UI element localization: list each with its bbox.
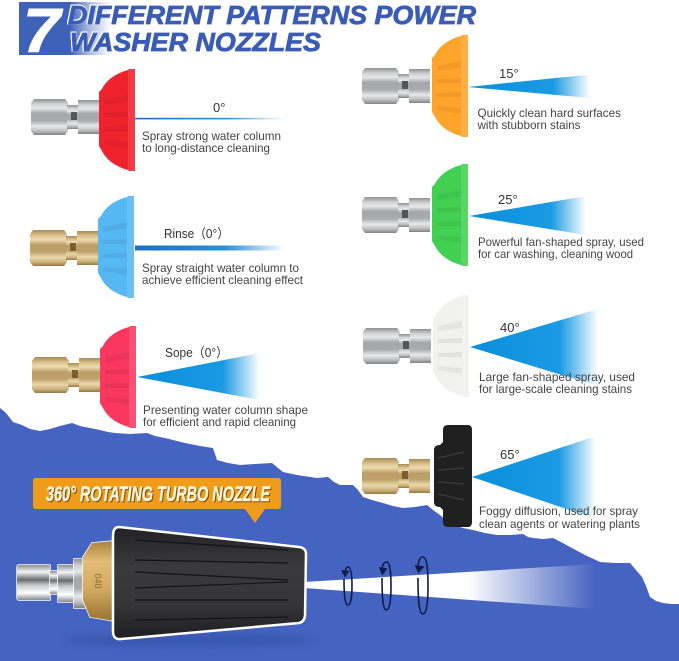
description: green nozzle: for car washing, cleaning wood — [478, 248, 633, 261]
description: red nozzle — [142, 130, 281, 155]
rotation arrow small — [342, 567, 352, 605]
silver connector — [17, 559, 85, 608]
body grooves — [135, 540, 288, 620]
description: blue nozzle: achieve efficient cleaning effect — [142, 274, 304, 287]
nozzle: black 65 degree — [362, 425, 640, 531]
torn blue background — [0, 408, 679, 661]
description: red nozzle: Spray strong water column — [142, 130, 281, 143]
description: pink nozzle — [143, 404, 308, 429]
description: white nozzle — [479, 371, 635, 396]
spray: soap fan — [137, 353, 260, 400]
nozzle: white 40 degree — [363, 295, 635, 397]
callout label: 360° ROTATING TURBO NOZZLE — [46, 483, 271, 506]
nozzle: blue rinse — [30, 196, 304, 298]
nozzle image: orange — [362, 35, 468, 137]
title banner — [19, 0, 476, 65]
rotation arrows — [342, 557, 428, 614]
spray: 25 degree — [469, 196, 586, 235]
nozzle image: white — [363, 295, 469, 397]
nozzle: pink soap — [32, 326, 308, 429]
nozzle image: pink — [32, 326, 136, 428]
nozzle shadow — [65, 633, 315, 647]
angle label 65: 65° — [500, 447, 520, 462]
description: black nozzle — [479, 505, 640, 531]
callout box — [33, 478, 281, 523]
description: black nozzle: clean agents or watering plants — [479, 518, 640, 531]
rotation arrow large — [416, 557, 428, 614]
description: pink nozzle: Presenting water column shape — [143, 404, 308, 417]
spray: 40 degree — [470, 309, 598, 386]
description: green nozzle: Powerful fan-shaped spray, used — [478, 236, 644, 249]
nozzle: orange 15 degree — [362, 35, 621, 137]
description: pink nozzle: for efficient and rapid cleaning — [143, 416, 296, 429]
brass hex — [83, 541, 114, 621]
description: green nozzle — [478, 236, 644, 261]
angle label 0: 0° — [213, 100, 225, 115]
callout: turbo nozzle — [33, 478, 281, 523]
banner background — [19, 2, 111, 55]
nozzle image: blue — [30, 196, 134, 298]
description: orange nozzle: Quickly clean hard surfaces — [478, 107, 621, 120]
nozzle: red 0 degree — [31, 69, 285, 171]
angle label rinse: Rinse（0°） — [164, 226, 229, 241]
description: blue nozzle — [142, 262, 304, 287]
heading line 1: DIFFERENT PATTERNS POWER — [68, 0, 476, 30]
spray: thin line — [135, 118, 285, 119]
description: orange nozzle — [476, 107, 621, 132]
description: red nozzle: to long-distance cleaning — [142, 142, 270, 155]
description: blue nozzle: Spray straight water column to — [142, 262, 299, 275]
description: white nozzle: for large-scale cleaning stains — [479, 383, 632, 396]
nozzle: green 25 degree — [362, 164, 644, 266]
turbo nozzle — [17, 527, 315, 647]
angle label soap: Sope（0°） — [165, 345, 228, 360]
angle label 40: 40° — [500, 320, 520, 335]
stamped number: 040 — [93, 573, 103, 589]
heading line 2: WASHER NOZZLES — [70, 27, 322, 57]
spray: 15 degree — [468, 74, 590, 98]
nozzle image: red — [31, 69, 135, 171]
angle label 15: 15° — [499, 66, 519, 81]
black body — [113, 527, 306, 639]
angle label 25: 25° — [498, 192, 518, 207]
spray: rinse column — [135, 246, 285, 250]
turbo water beam — [304, 564, 596, 609]
description: white nozzle: Large fan-shaped spray, used — [479, 371, 635, 384]
description: black nozzle: Foggy diffusion, used for spray — [479, 505, 638, 518]
description: orange nozzle: with stubborn stains — [476, 119, 581, 132]
rotation arrow medium — [380, 562, 391, 610]
spray: 65 degree — [472, 436, 596, 519]
nozzle image: black — [362, 425, 472, 527]
nozzle image: green — [362, 164, 468, 266]
